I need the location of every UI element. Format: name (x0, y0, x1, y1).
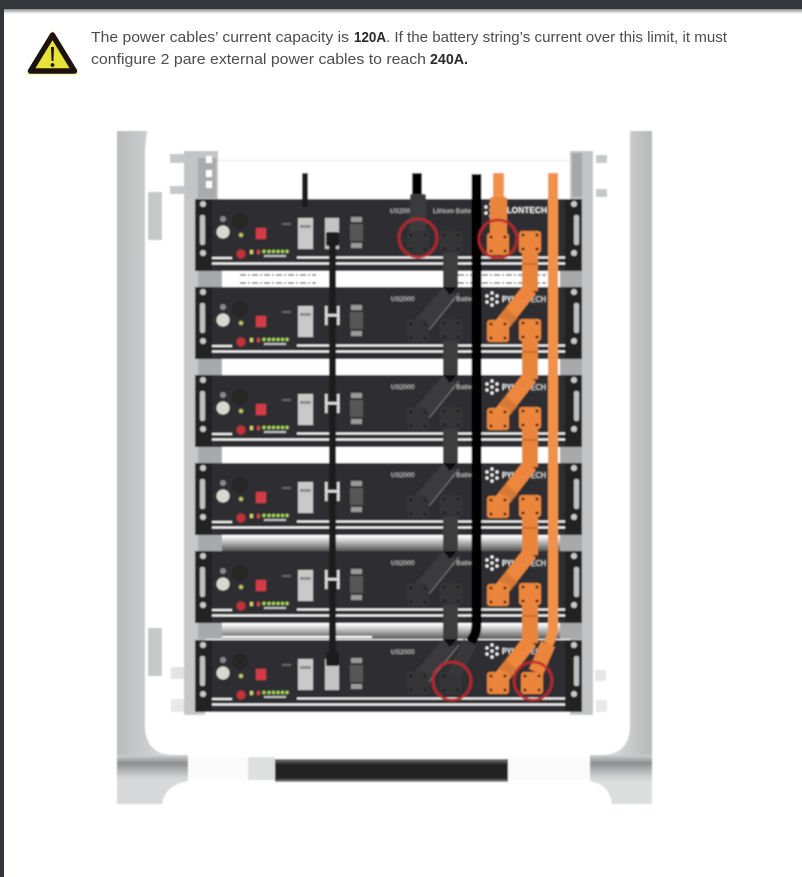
warning text: . If the battery string’s current over this limit, it must (386, 29, 728, 46)
shaded gaps above lower modules (222, 536, 560, 639)
battery module 4 (195, 463, 582, 535)
battery module 3: n Batte (451, 384, 472, 391)
battery module 3 (195, 375, 582, 447)
battery module 5: n Batte (451, 560, 472, 567)
warning text: 120A (354, 29, 386, 46)
external negative cable, bottom module (454, 174, 476, 676)
icon: warning triangle (26, 30, 79, 75)
warning text (91, 29, 728, 68)
cabinet background (117, 131, 652, 804)
warning text: 240A. (430, 51, 468, 68)
battery module 2 (195, 287, 582, 359)
external positive cable, bottom module (521, 173, 553, 694)
red highlight circles (399, 219, 552, 700)
negative terminals and jumpers (407, 231, 462, 694)
battery module 1 (195, 199, 582, 271)
positive terminals and jumpers (487, 231, 541, 694)
battery module 6: US2000 (391, 649, 415, 656)
communication cables (302, 173, 340, 666)
printed label strip in first gap (240, 275, 546, 283)
battery module 6: PYLONTECH (502, 647, 546, 656)
battery module 2: PYLONTECH (502, 295, 546, 304)
battery module 5: PYLONTECH (502, 559, 546, 568)
battery module 3: PYLONTECH (502, 383, 546, 392)
rack photo (117, 131, 652, 804)
warning text: The power cables’ current capacity is (91, 29, 349, 46)
battery module 4: n Batte (451, 472, 472, 479)
battery module 4: US2000 (391, 472, 415, 479)
battery module 1: Lithium Batte (433, 208, 471, 215)
right rack rail (560, 151, 593, 715)
external negative cable, top module (407, 173, 429, 253)
battery module 6 (195, 640, 582, 712)
battery module 5: US2000 (391, 560, 415, 567)
left rack rail (184, 151, 222, 715)
warning text: configure 2 pare external power cables to reach (91, 51, 426, 68)
battery module 4: PYLONTECH (502, 471, 546, 480)
viewer frame: top shadow (4, 9, 802, 14)
mounting brackets (148, 154, 607, 712)
battery module 1: YLONTECH (501, 206, 547, 215)
battery module 2: US2000 (391, 296, 415, 303)
viewer frame: top bar (0, 0, 802, 9)
viewer frame: left edge (0, 0, 4, 877)
battery module 3: US2000 (391, 384, 415, 391)
battery module 2: n Batte (451, 296, 472, 303)
battery module 5 (195, 551, 582, 623)
external positive cable, top module (487, 173, 509, 255)
battery module 1: US200 (390, 208, 410, 215)
